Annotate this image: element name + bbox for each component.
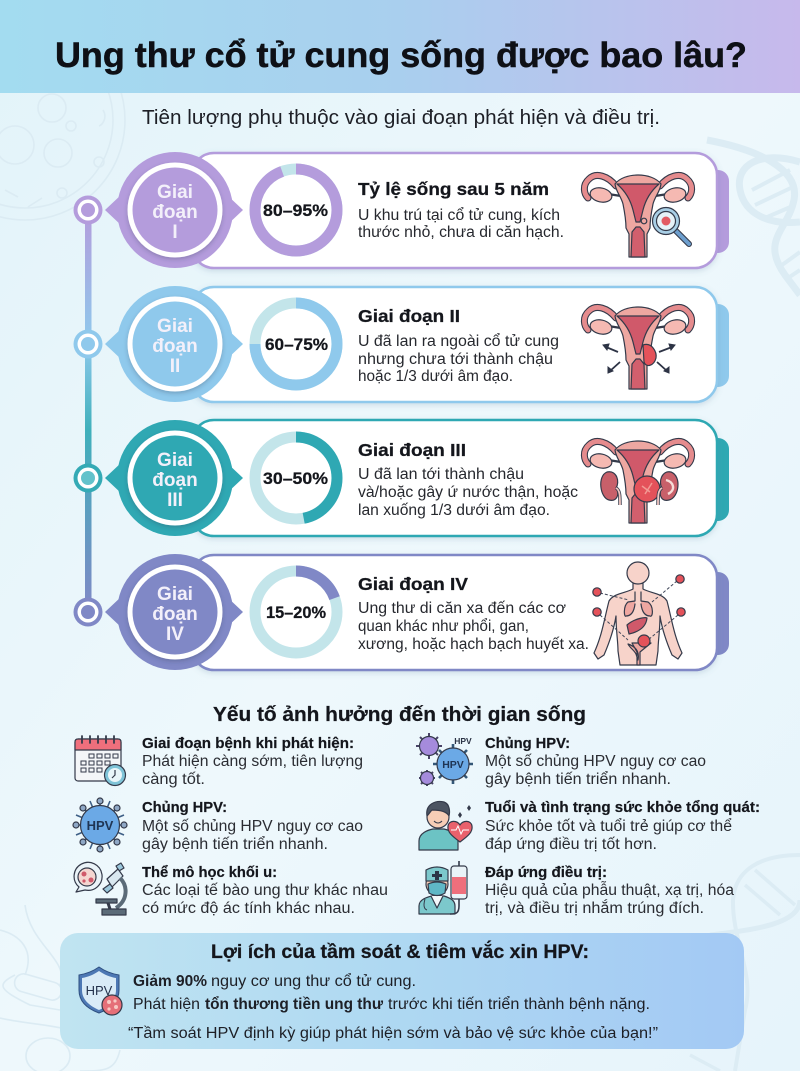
stage III text: U đã lan tới thành chậu bbox=[358, 466, 524, 483]
stage badge I: đoạn bbox=[152, 202, 198, 223]
icon: HPV virus: HPV bbox=[87, 818, 114, 833]
stage badge IV: Giai bbox=[157, 584, 193, 605]
panel: stage IV bbox=[105, 554, 729, 670]
stage II text: nhưng chưa tới thành chậu bbox=[358, 351, 553, 368]
factor: HPV strain right: Một số chủng HPV nguy cơ cao bbox=[485, 753, 706, 770]
benefit line 2: trước khi tiến triển thành bệnh nặng. bbox=[388, 996, 650, 1013]
stage badge IV: đoạn bbox=[152, 604, 198, 625]
stage badge IV: IV bbox=[166, 624, 184, 645]
stage badge IV bbox=[105, 554, 243, 670]
donut chart 15-20%: 15–20% bbox=[266, 603, 326, 622]
factor: age and health: Tuổi và tình trạng sức khỏe tổng quát: bbox=[485, 799, 760, 816]
icon: calendar bbox=[75, 736, 126, 786]
donut chart 15-20% bbox=[255, 571, 337, 653]
benefit line 1: Giảm 90% bbox=[133, 973, 207, 990]
factor: age and health bbox=[419, 799, 760, 853]
stage IV text: quan khác như phổi, gan, bbox=[358, 618, 529, 635]
benefit line 2: Phát hiện bbox=[133, 996, 200, 1013]
factor: treatment response: trị, và điều trị nhắm trúng đích. bbox=[485, 900, 704, 917]
factor: HPV strain right: Chủng HPV: bbox=[485, 735, 570, 752]
timeline line with nodes bbox=[74, 196, 102, 626]
factor: HPV strain right: gây bệnh tiến triển nhanh. bbox=[485, 771, 671, 788]
factor: HPV strain left: gây bệnh tiến triển nhanh. bbox=[142, 836, 328, 853]
donut chart 60-75% bbox=[255, 303, 337, 385]
icon: person with heart bbox=[419, 802, 472, 850]
factor: histology: Thể mô học khối u: bbox=[142, 864, 277, 881]
factor: stage at detection: Giai đoạn bệnh khi phát hiện: bbox=[142, 735, 354, 752]
donut chart 60-75%: 60–75% bbox=[265, 335, 328, 354]
icon: HPV virus bbox=[73, 798, 127, 852]
factor: treatment response: Đáp ứng điều trị: bbox=[485, 864, 607, 881]
stage badge III: III bbox=[167, 490, 183, 511]
stage badge I: I bbox=[172, 222, 178, 243]
panel: stage III bbox=[105, 420, 729, 536]
factor: stage at detection bbox=[75, 735, 363, 788]
stage IV text: Giai đoạn IV bbox=[358, 574, 468, 594]
factor: HPV strain right bbox=[416, 733, 706, 788]
factor: age and health: đáp ứng điều trị tốt hơn. bbox=[485, 836, 657, 853]
factor: histology: Các loại tế bào ung thư khác nhau bbox=[142, 882, 388, 899]
stage badge I: Giai bbox=[157, 182, 193, 203]
title: Ung thư cổ tử cung sống được bao lâu? bbox=[55, 36, 747, 75]
factor: HPV strain left bbox=[73, 798, 363, 853]
factor: histology bbox=[74, 862, 388, 917]
panel heading: Lợi ích của tầm soát & tiêm vắc xin HPV: bbox=[211, 939, 589, 963]
factor: stage at detection: Phát hiện càng sớm, tiên lượng bbox=[142, 753, 363, 770]
benefit line 2: tổn thương tiền ung thư bbox=[205, 996, 384, 1013]
stage badge II: Giai bbox=[157, 316, 193, 337]
donut chart 80-95%: 80–95% bbox=[263, 201, 328, 220]
icon: uterus with tumor and kidneys bbox=[584, 441, 692, 523]
icon: uterus with magnifier bbox=[584, 175, 692, 257]
factor: histology: có mức độ ác tính khác nhau. bbox=[142, 900, 355, 917]
stage I text: Tỷ lệ sống sau 5 năm bbox=[358, 179, 549, 199]
stage III text: Giai đoạn III bbox=[358, 440, 466, 460]
donut chart 30-50% bbox=[255, 437, 337, 519]
stage badge III: đoạn bbox=[152, 470, 198, 491]
icon: HPV shield bbox=[79, 967, 122, 1015]
stage III text: và/hoặc gây ứ nước thận, hoặc bbox=[358, 484, 578, 501]
stage IV text: xương, hoặc hạch bạch huyết xa. bbox=[358, 636, 589, 653]
icon: uterus with spreading tumor bbox=[584, 307, 692, 389]
icon: HPV viruses: HPV bbox=[454, 736, 472, 746]
factor: HPV strain left: Chủng HPV: bbox=[142, 799, 227, 816]
header banner bbox=[0, 0, 800, 93]
stage badge I bbox=[105, 152, 243, 268]
heading: factors: Yếu tố ảnh hưởng đến thời gian sống bbox=[213, 703, 586, 726]
stage I text: U khu trú tại cổ tử cung, kích bbox=[358, 207, 560, 224]
benefit line 1: nguy cơ ung thư cổ tử cung. bbox=[211, 973, 416, 990]
factor: HPV strain left: Một số chủng HPV nguy cơ cao bbox=[142, 818, 363, 835]
subtitle: Tiên lượng phụ thuộc vào giai đoạn phát hiện và điều trị. bbox=[142, 107, 660, 129]
stage IV text bbox=[358, 574, 589, 653]
factor: age and health: Sức khỏe tốt và tuổi trẻ giúp cơ thể bbox=[485, 818, 732, 835]
stage III text: lan xuống 1/3 dưới âm đạo. bbox=[358, 502, 550, 519]
stage II text: Giai đoạn II bbox=[358, 306, 460, 326]
donut chart 30-50%: 30–50% bbox=[263, 469, 328, 488]
stage II text: U đã lan ra ngoài cổ tử cung bbox=[358, 333, 559, 350]
stage badge II bbox=[105, 286, 243, 402]
stage I text bbox=[358, 179, 564, 241]
stage I text: thước nhỏ, chưa di căn hạch. bbox=[358, 224, 564, 241]
icon: HPV viruses bbox=[416, 733, 473, 786]
panel: stage I bbox=[105, 152, 729, 268]
stage badge III bbox=[105, 420, 243, 536]
panel: HPV screening and vaccine benefits bbox=[60, 933, 744, 1049]
factor: stage at detection: càng tốt. bbox=[142, 771, 205, 788]
donut chart 80-95% bbox=[255, 169, 337, 251]
icon: microscope bbox=[74, 862, 126, 915]
factor: treatment response bbox=[419, 861, 734, 917]
stage badge II: II bbox=[170, 356, 180, 377]
stage badge III: Giai bbox=[157, 450, 193, 471]
stage IV text: Ung thư di căn xa đến các cơ bbox=[358, 600, 566, 617]
icon: HPV shield: HPV bbox=[86, 983, 113, 998]
icon: body with metastases bbox=[593, 562, 685, 665]
stage III text bbox=[358, 440, 578, 519]
stage II text: hoặc 1/3 dưới âm đạo. bbox=[358, 368, 513, 385]
panel: stage II bbox=[105, 286, 729, 402]
stage II text bbox=[358, 306, 559, 385]
quote: “Tầm soát HPV định kỳ giúp phát hiện sớm và bảo vệ sức khỏe của bạn!” bbox=[128, 1025, 658, 1042]
stage badge II: đoạn bbox=[152, 336, 198, 357]
icon: doctor and IV bag bbox=[419, 861, 467, 914]
icon: HPV viruses: HPV bbox=[442, 759, 464, 771]
factor: treatment response: Hiệu quả của phẫu thuật, xạ trị, hóa bbox=[485, 882, 734, 899]
